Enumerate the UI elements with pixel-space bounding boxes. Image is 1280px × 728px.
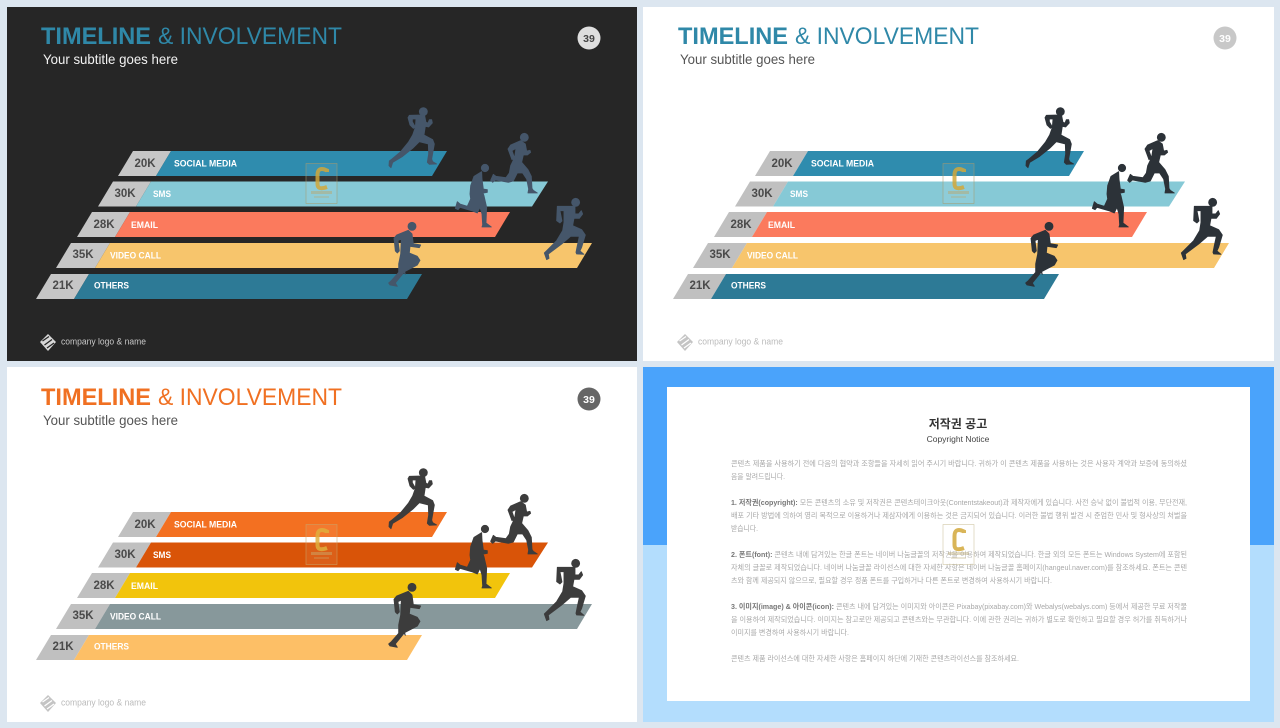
notice body text: 3. 이미지(image) & 아이콘(icon): 콘텐츠 내에 담겨있는 이미지와 아이콘은 Pixabay(pixabay.com)와 Webalys(webalys.com) 등에서 제공한 무료 저작물 [731, 602, 1187, 611]
watermark [943, 524, 974, 564]
bar: others 21K: 21K [52, 641, 74, 653]
title: TIMELINE [41, 384, 151, 411]
notice body text: 콘텐츠 제품을 사용하기 전에 다음의 협약과 조항들을 자세히 읽어 주시기 바랍니다. 귀하가 이 콘텐츠 제품을 사용하는 것은 사용자 계약과 보증에 동의하셨 [731, 459, 1187, 468]
bar: others 21K: OTHERS [94, 642, 129, 652]
title: & INVOLVEMENT [158, 23, 342, 50]
bar: video call 35K [693, 243, 1229, 268]
panel: white slide with orange bars [7, 367, 637, 722]
bar: sms 30K: 30K [114, 549, 136, 561]
company logo [677, 334, 783, 351]
bar: social media 20K: 20K [134, 519, 156, 531]
subtitle: Your subtitle goes here [43, 412, 178, 428]
runners [389, 469, 585, 647]
bar: sms 30K [98, 182, 548, 206]
bar: video call 35K [56, 243, 592, 268]
notice body text: 배포 기타 방법에 의하여 영리 목적으로 이용하거나 제삼자에게 이용하는 것은 금지되어 있습니다. 이러한 불법 행위 발견 시 준엄한 민사 및 형사상의 처벌을 [731, 511, 1187, 520]
bar: video call 35K: VIDEO CALL [747, 250, 798, 260]
bar: email 28K [77, 212, 510, 237]
watermark [306, 164, 337, 204]
notice body text: 자체의 글꼴로 제작되었습니다. 네이버 나눔글꼴 라이선스에 대한 자세한 사항은 네이버 나눔글꼴 홈페이지(hangeul.naver.com)를 참조하세요. 폰트는 콘텐 [731, 563, 1187, 572]
title [678, 23, 979, 50]
bar: email 28K: 28K [93, 580, 115, 592]
notice body text [731, 459, 1187, 663]
notice body text: 이미지를 변경하여 사용하시기 바랍니다. [731, 628, 849, 637]
bar: sms 30K: 30K [751, 188, 773, 200]
bar: social media 20K: 20K [771, 158, 793, 170]
bar: email 28K: EMAIL [131, 220, 158, 230]
bar: video call 35K: VIDEO CALL [110, 250, 161, 260]
page number badge [578, 26, 600, 50]
notice heading: 저작권 공고 [929, 416, 987, 431]
bar: others 21K: OTHERS [731, 280, 766, 290]
page number badge: 39 [1219, 33, 1231, 45]
bar: others 21K: 21K [689, 280, 711, 292]
notice body text: 1. 저작권(copyright): 모든 콘텐츠의 소유 및 저작권은 콘텐츠테이크아웃(Contentstakeout)과 제작자에게 있습니다. 사전 승낙 없이 불법적 이용, 무단전재, [731, 498, 1187, 507]
page number badge: 39 [583, 33, 595, 45]
bar: sms 30K: SMS [153, 550, 171, 560]
bar: social media 20K: 20K [134, 158, 156, 170]
bar: video call 35K: 35K [72, 610, 94, 622]
title [41, 23, 342, 50]
page number badge [578, 388, 600, 410]
bar: sms 30K: 30K [114, 188, 136, 200]
company logo [40, 695, 146, 712]
title: & INVOLVEMENT [158, 384, 342, 411]
panel: white slide with blue bars [643, 7, 1274, 361]
notice heading: Copyright Notice [927, 434, 990, 444]
company logo: company logo & name [61, 698, 146, 708]
bar: video call 35K: 35K [72, 249, 94, 261]
bar: sms 30K: SMS [153, 189, 171, 199]
bar: social media 20K: SOCIAL MEDIA [174, 520, 237, 530]
bar: others 21K [36, 274, 422, 299]
bar: social media 20K [755, 151, 1084, 176]
title: & INVOLVEMENT [795, 23, 979, 50]
company logo: company logo & name [61, 336, 146, 346]
title: TIMELINE [41, 23, 151, 50]
bar: social media 20K [118, 512, 447, 537]
watermark [306, 524, 337, 564]
bar: social media 20K [118, 151, 447, 176]
notice body text: 츠와 함께 제공되지 않으므로, 필요할 경우 정품 폰트를 구입하거나 다른 폰트로 변경하여 사용하시기 바랍니다. [731, 576, 1052, 585]
bar: email 28K: EMAIL [768, 220, 795, 230]
bar: others 21K: OTHERS [94, 280, 129, 290]
bar: video call 35K: 35K [709, 249, 731, 261]
page number badge [1214, 26, 1236, 50]
title [41, 384, 342, 411]
notice body text: 콘텐츠 제품 라이선스에 대한 자세한 사항은 홈페이지 하단에 기재한 콘텐츠라이선스를 참조하세요. [731, 654, 1019, 663]
bar: email 28K [77, 573, 510, 598]
panel: copyright notice [643, 367, 1274, 722]
bar: social media 20K: SOCIAL MEDIA [811, 158, 874, 168]
bar: video call 35K [56, 604, 592, 629]
notice body text: 음을 알려드립니다. [731, 472, 785, 481]
notice body text: 받습니다. [731, 524, 758, 533]
runners [389, 108, 585, 286]
bar: email 28K: 28K [93, 219, 115, 231]
bar: others 21K [673, 274, 1059, 299]
bar: sms 30K: SMS [790, 189, 808, 199]
company logo: company logo & name [698, 336, 783, 346]
company logo [40, 334, 146, 351]
notice heading [927, 416, 990, 444]
panel: dark slide [7, 7, 637, 361]
bar: others 21K [36, 635, 422, 660]
title: TIMELINE [678, 23, 788, 50]
bar: email 28K: EMAIL [131, 581, 158, 591]
watermark [943, 164, 974, 204]
notice body text: 2. 폰트(font): 콘텐츠 내에 담겨있는 한글 폰트는 네이버 나눔글꼴의 저작권을 이용하여 제작되었습니다. 한글 외의 모든 폰트는 Windows System에 포함된 [731, 550, 1187, 559]
page number badge: 39 [583, 394, 595, 406]
bar: social media 20K: SOCIAL MEDIA [174, 158, 237, 168]
bar: others 21K: 21K [52, 280, 74, 292]
subtitle: Your subtitle goes here [43, 51, 178, 67]
bar: email 28K [714, 212, 1147, 237]
runners [1026, 108, 1222, 286]
bar: sms 30K [735, 182, 1185, 206]
bar: sms 30K [98, 542, 548, 568]
bar: email 28K: 28K [730, 219, 752, 231]
bar: video call 35K: VIDEO CALL [110, 612, 161, 622]
notice body text: 을 이용하여 제작되었습니다. 이미지는 참고로만 제공되고 콘텐츠와는 무관합니다. 이에 관한 권리는 귀하가 별도로 확인하고 필요할 경우 허가를 취득하거나 [731, 615, 1187, 624]
subtitle: Your subtitle goes here [680, 51, 815, 67]
